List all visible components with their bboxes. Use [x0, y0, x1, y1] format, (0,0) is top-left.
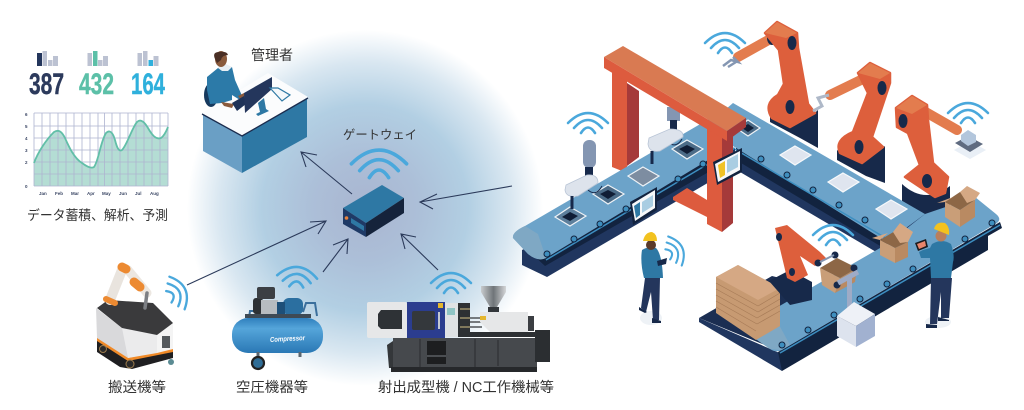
worker right	[915, 223, 954, 328]
robot base 2	[837, 146, 885, 183]
stat: 387	[29, 51, 64, 101]
panel: administrator at desk	[202, 47, 308, 173]
area chart: 2	[25, 160, 28, 165]
boxes	[872, 186, 980, 263]
label: compressor: 空圧機器等	[236, 378, 308, 396]
AGV body	[96, 300, 174, 369]
panel: injection machine	[367, 273, 554, 396]
parts on conveyor	[555, 120, 760, 226]
conveyor A	[513, 105, 760, 277]
background glow	[187, 30, 543, 386]
compressor machine: Compressor	[270, 335, 306, 344]
label: data storage: データ蓄積、解析、予測	[27, 207, 168, 223]
area chart: Aug	[150, 191, 159, 196]
label: administrator: 管理者	[251, 47, 293, 63]
gateway box	[343, 185, 404, 237]
area chart	[25, 112, 168, 196]
gantry frame	[604, 46, 746, 232]
robot arm 1	[723, 22, 815, 127]
tool head 1	[565, 140, 602, 209]
panel: data storage and analysis	[25, 51, 168, 223]
conveyor C	[699, 197, 1002, 371]
icon: compressor wifi	[276, 265, 318, 289]
area chart: Jan	[39, 191, 47, 196]
area chart: Mar	[71, 191, 79, 196]
label: gateway: ゲートウェイ	[343, 128, 417, 142]
area chart: 5	[25, 124, 28, 129]
screen 1	[630, 187, 657, 225]
tool head 2	[648, 107, 683, 164]
person	[204, 51, 245, 108]
area chart: 4	[25, 136, 28, 141]
gantry rear post	[612, 70, 639, 173]
cardboard stack	[716, 265, 780, 340]
screen 2	[713, 148, 742, 185]
injection moulding machine	[367, 286, 550, 372]
label: injection moulding / NC: 射出成型機 / NC工作機械等	[378, 378, 554, 396]
monitor and tablet	[232, 77, 290, 116]
worker left	[639, 232, 667, 325]
icon: arm wifi	[705, 33, 745, 53]
robot base 3	[902, 184, 950, 226]
panel: compressor	[232, 265, 323, 396]
stat: 387: 387	[29, 68, 64, 101]
icon: gateway wifi	[351, 150, 407, 178]
conveyor B	[704, 103, 925, 256]
panel: gateway	[343, 128, 417, 237]
held box	[814, 252, 858, 293]
stat: 432: 432	[79, 68, 114, 101]
icon: pick robot wifi	[813, 225, 853, 245]
stat: 164	[131, 51, 165, 101]
area chart: 0	[25, 184, 28, 189]
stat: 432	[79, 51, 114, 101]
robot base 1	[770, 110, 818, 148]
area chart: 6	[25, 112, 28, 117]
pick and place robot	[769, 225, 826, 305]
icon: tool wifi	[568, 113, 608, 133]
area chart: Jul	[135, 191, 142, 196]
area chart: Apr	[87, 191, 95, 196]
label: AGV: 搬送機等	[108, 378, 166, 396]
panel: smart factory	[513, 22, 1002, 371]
area chart: Jun	[119, 191, 127, 196]
desk	[202, 73, 308, 173]
panel: AGV	[96, 267, 193, 396]
stat: 164: 164	[131, 68, 165, 101]
robot arm 2	[813, 63, 890, 163]
robot arm 3	[896, 96, 986, 197]
icon: arm 3 wifi	[948, 103, 988, 123]
area chart: May	[102, 191, 111, 196]
icon: AGV wifi	[161, 273, 193, 313]
arrows	[187, 152, 512, 285]
area chart: 3	[25, 148, 28, 153]
icon: worker wifi	[661, 233, 689, 269]
inspection post	[837, 272, 875, 347]
AGV robot arm	[106, 267, 147, 308]
area chart: Feb	[55, 191, 63, 196]
icon: injection wifi	[431, 273, 471, 293]
